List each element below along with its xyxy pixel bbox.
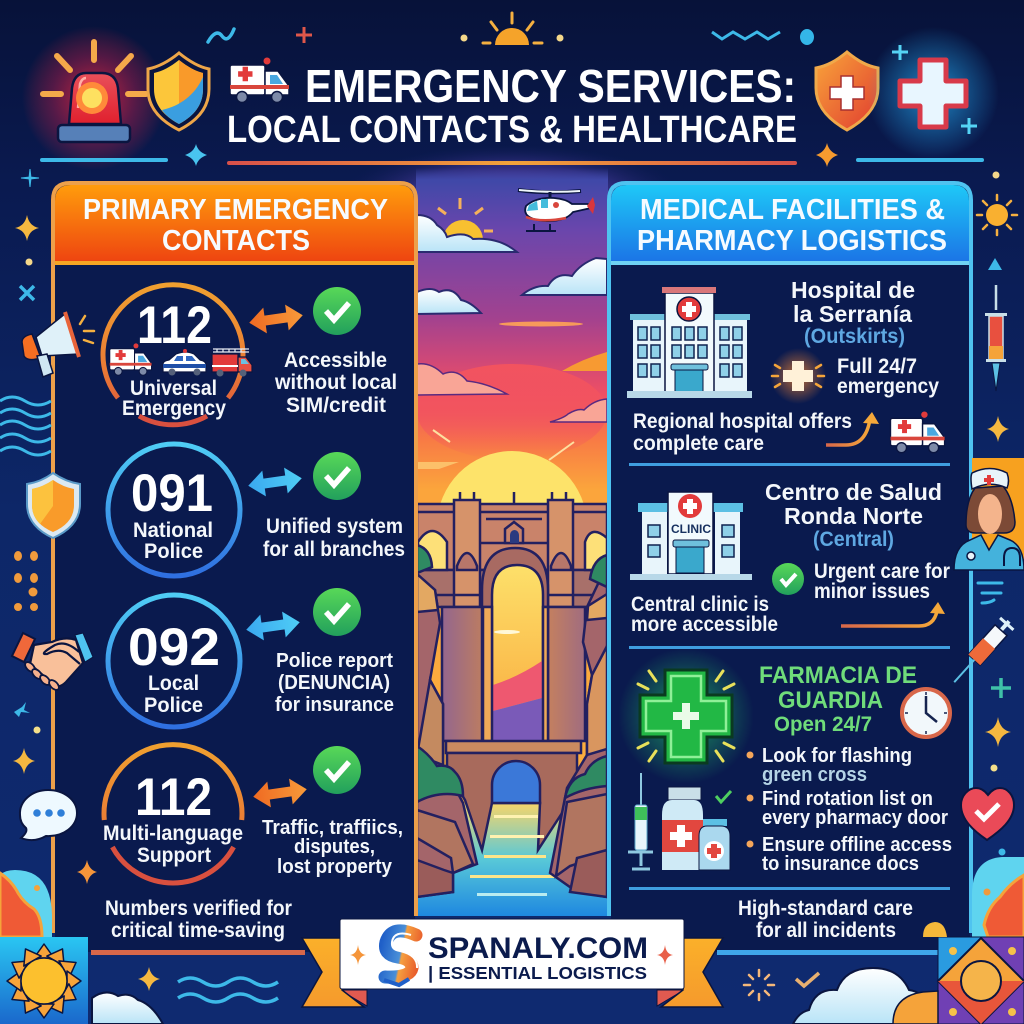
- arrow: [246, 465, 304, 499]
- note: (DENUNCIA): [278, 672, 390, 694]
- logo box: | ESSENTIAL LOGISTICS: [428, 963, 647, 983]
- contact: 091 national police: [108, 444, 240, 576]
- contact: 092 local police: 092: [128, 618, 220, 677]
- contact: 091 national police: Police: [144, 540, 203, 563]
- icon: check: [313, 746, 361, 794]
- hospital name: (Outskirts): [804, 325, 905, 348]
- icon: speech bubble: [20, 790, 77, 840]
- contact: 091 national police: National: [133, 519, 213, 542]
- icon: syringe and bottles: [628, 773, 731, 870]
- panel: medical facilities and pharmacy: [609, 183, 971, 955]
- icon: vertical syringe: [985, 285, 1007, 391]
- footer note: [738, 897, 913, 942]
- icon: heart: [961, 788, 1014, 840]
- note: [263, 515, 405, 561]
- contact: 092 local police: Local: [148, 672, 199, 695]
- text: regional hospital: [633, 410, 852, 455]
- panel header: [55, 185, 414, 262]
- title: LOCAL CONTACTS & HEALTHCARE: [227, 109, 797, 151]
- note: Police report: [276, 650, 393, 672]
- icon: ambulance: [890, 411, 945, 453]
- icon: right shield: [816, 52, 878, 130]
- pharmacy heading: FARMACIA DE: [759, 662, 917, 689]
- center illustration: Ronda bridge at sunset: [416, 168, 608, 916]
- text: urgent care: minor issues: [814, 580, 930, 603]
- bottom right hill: [972, 857, 1024, 937]
- icon: siren: [22, 26, 166, 170]
- note: without local: [274, 371, 397, 394]
- footer note: critical time-saving: [111, 919, 285, 942]
- text: urgent care: [814, 560, 950, 603]
- bullet list: to insurance docs: [762, 853, 919, 875]
- note: lost property: [277, 856, 393, 878]
- left margin decorations: [0, 169, 97, 884]
- icon: title ambulance: [230, 58, 289, 102]
- note: Traffic, traffiics,: [262, 817, 403, 839]
- bullet list: [746, 745, 952, 875]
- icon: glowing cross: [867, 27, 999, 159]
- footer note: Numbers verified for: [105, 897, 292, 920]
- heading: [83, 194, 388, 257]
- bottom right decorations: [744, 922, 947, 1024]
- bullet list: Find rotation list on: [762, 788, 933, 810]
- panel header: [611, 185, 969, 262]
- arrow: [841, 602, 945, 626]
- note: Accessible: [284, 349, 387, 372]
- ribbon left: [302, 938, 367, 1007]
- heading: PRIMARY EMERGENCY: [83, 194, 388, 226]
- bullet list: every pharmacy door: [762, 807, 948, 829]
- icon: check: [313, 287, 361, 335]
- contact: 112 universal emergency: 112: [137, 296, 212, 355]
- contact: 112 universal emergency: Emergency: [122, 397, 226, 420]
- header decorations: [40, 13, 984, 167]
- note: Unified system: [266, 515, 403, 538]
- heading: MEDICAL FACILITIES &: [640, 194, 945, 226]
- icon: clinic: [630, 492, 752, 580]
- icon: left orange shield: [27, 473, 80, 538]
- panel body: [611, 262, 970, 952]
- icon: helicopter: [518, 190, 595, 231]
- footer note: [105, 897, 292, 942]
- bullet list: Look for flashing: [762, 745, 912, 767]
- note: [262, 817, 403, 878]
- text: emergency: Full 24/7: [837, 355, 917, 378]
- heading: [637, 194, 947, 257]
- pharmacy heading: Open 24/7: [774, 713, 872, 736]
- icon: glowing cross: [770, 348, 826, 404]
- heading: PHARMACY LOGISTICS: [637, 225, 947, 257]
- icon: left shield: [148, 53, 209, 130]
- ribbon right: [657, 938, 723, 1007]
- text: emergency: [837, 355, 939, 398]
- icon: hospital: [627, 287, 752, 398]
- contact: 112 multi-language support: Multi-language: [103, 822, 243, 845]
- icon: nurse: [954, 458, 1024, 570]
- panel frame: [609, 183, 971, 933]
- contact: 091 national police: 091: [131, 464, 213, 523]
- icon: diagonal syringe: [948, 615, 1016, 688]
- text: regional hospital: Regional hospital offers: [633, 410, 852, 433]
- contact: 112 multi-language support: [103, 745, 243, 883]
- cliffs: [417, 545, 607, 897]
- icon: clock: [902, 689, 950, 737]
- icon: clinic: CLINIC: [671, 522, 711, 536]
- clinic name: Centro de Salud: [765, 479, 942, 505]
- right margin decorations: [977, 172, 1017, 856]
- contact: 112 universal emergency: [103, 285, 252, 425]
- arrow: [251, 776, 309, 810]
- icon: S logo: [384, 931, 417, 985]
- icon: ambulance: [110, 343, 152, 375]
- icon: fire truck: [212, 349, 252, 376]
- bottom left hill: [0, 870, 52, 937]
- contact: 112 multi-language support: 112: [135, 768, 212, 827]
- contact: 112 universal emergency: Universal: [130, 377, 217, 400]
- hospital name: la Serranía: [793, 301, 912, 327]
- note: for insurance: [275, 694, 394, 716]
- arrow: [244, 609, 302, 643]
- text: emergency: emergency: [837, 375, 939, 398]
- sun: [437, 451, 587, 601]
- note: [275, 650, 394, 716]
- icon: green pharmacy cross: [618, 648, 754, 784]
- small sun and clouds: [417, 198, 607, 469]
- panel body: [55, 262, 415, 952]
- text: central clinic: Central clinic is: [631, 593, 769, 616]
- footer note: High-standard care: [738, 897, 913, 920]
- icon: police car: [163, 349, 206, 376]
- text: central clinic: more accessible: [631, 613, 778, 636]
- hospital name: Hospital de: [791, 277, 915, 303]
- contact: 092 local police: Police: [144, 694, 203, 717]
- panel frame: [53, 183, 416, 933]
- hospital name: [791, 277, 915, 348]
- icon: check: [313, 452, 361, 500]
- bullet list: Ensure offline access: [762, 834, 952, 856]
- bullet list: green cross: [762, 764, 867, 786]
- icon: check: [313, 588, 361, 636]
- icon: handshake: [12, 633, 93, 692]
- text: central clinic: [631, 593, 778, 636]
- clinic name: (Central): [813, 528, 894, 551]
- text: urgent care: Urgent care for: [814, 560, 950, 583]
- water: [417, 803, 607, 916]
- bottom left decorations: [92, 967, 278, 1024]
- clinic name: [765, 479, 942, 551]
- logo box: [340, 919, 684, 989]
- panel: primary emergency contacts: [53, 183, 416, 955]
- arrow: [826, 412, 879, 445]
- title: EMERGENCY SERVICES:: [305, 60, 796, 112]
- icon: diamond tile: [938, 937, 1024, 1024]
- footer note: for all incidents: [756, 919, 896, 942]
- icon: sun tile: [0, 937, 88, 1024]
- logo box: SPANALY.COM: [428, 932, 648, 965]
- text: regional hospital: complete care: [633, 432, 764, 455]
- water highlights: [470, 815, 560, 896]
- note: [274, 349, 397, 417]
- icon: check: [772, 563, 804, 595]
- title: [227, 60, 797, 151]
- arrow: [247, 302, 305, 336]
- note: for all branches: [263, 538, 405, 561]
- title rule: [227, 161, 797, 165]
- icon: megaphone: [22, 312, 94, 377]
- contact: 092 local police: [108, 595, 240, 727]
- heading: CONTACTS: [162, 225, 310, 257]
- clinic name: Ronda Norte: [784, 503, 923, 529]
- pharmacy heading: [759, 662, 917, 736]
- pharmacy heading: GUARDIA: [778, 687, 883, 714]
- contact: 112 multi-language support: Support: [137, 844, 211, 867]
- note: disputes,: [294, 836, 375, 858]
- note: SIM/credit: [286, 394, 386, 417]
- bridge: [417, 492, 607, 850]
